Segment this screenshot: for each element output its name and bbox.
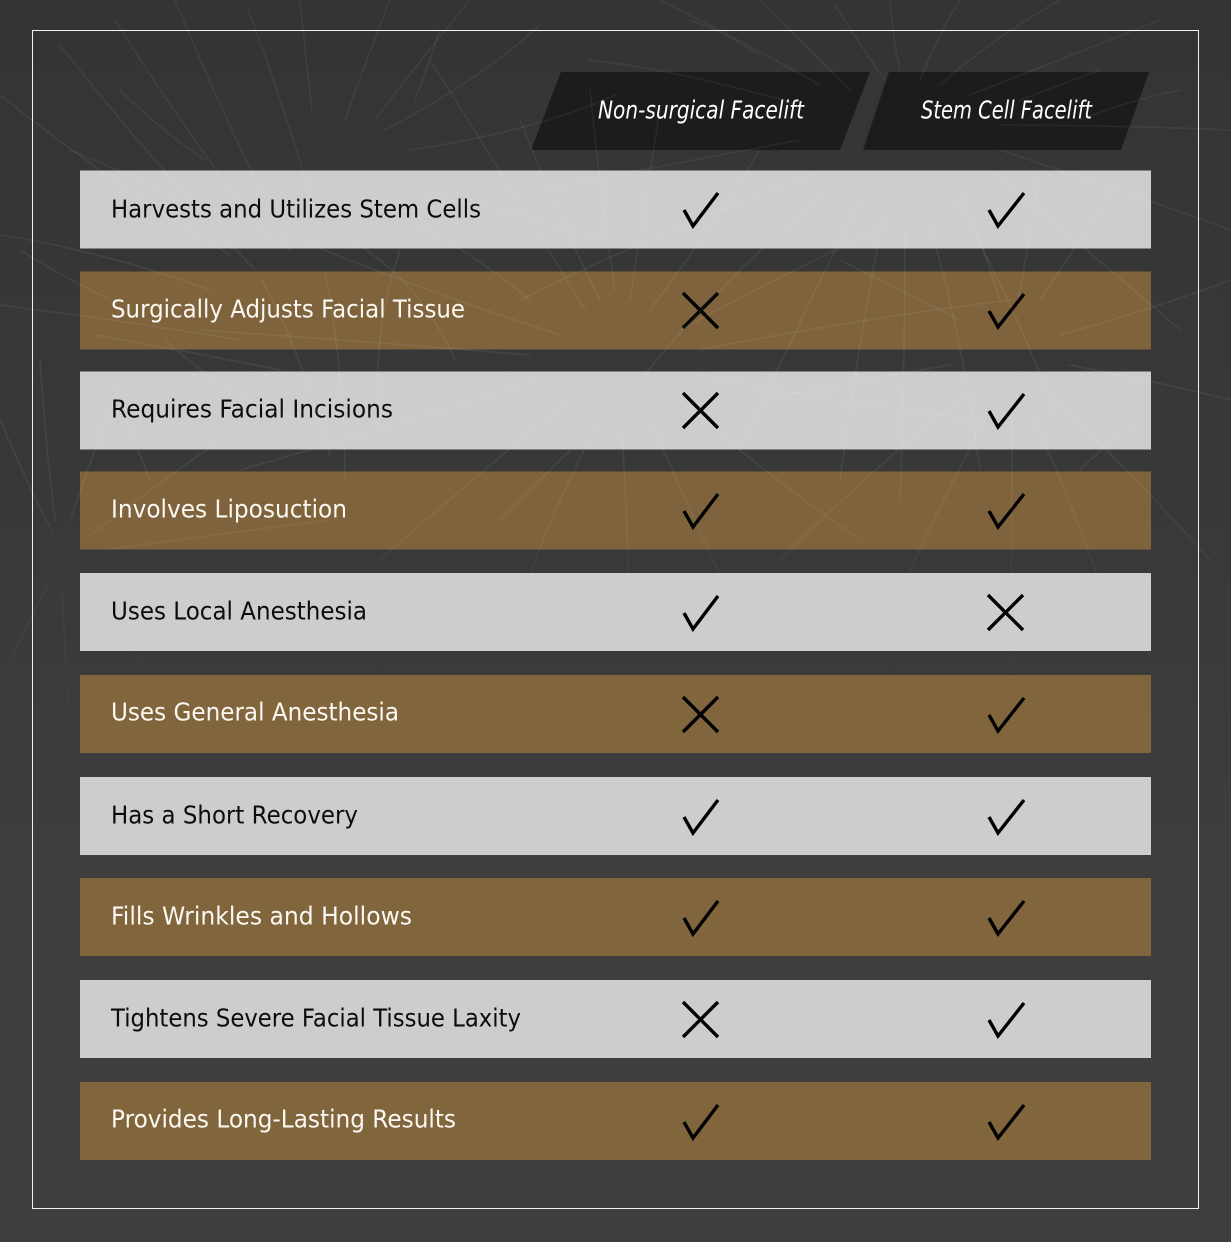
row: Provides Long-Lasting Results: Provides Long-Lasting Results [111, 1104, 456, 1134]
row: Uses General Anesthesia [80, 675, 1151, 753]
row: Tightens Severe Facial Tissue Laxity: Tightens Severe Facial Tissue Laxity [110, 1004, 521, 1032]
row: Requires Facial Incisions: Requires Facial Incisions [111, 394, 393, 424]
row: Harvests and Utilizes Stem Cells: Harvests and Utilizes Stem Cells [111, 194, 481, 224]
row: Surgically Adjusts Facial Tissue [80, 272, 1151, 350]
column header: Stem Cell Facelift [863, 72, 1149, 150]
row: Involves Liposuction: Involves Liposuction [111, 494, 347, 524]
row: Has a Short Recovery: Has a Short Recovery [111, 800, 358, 830]
column header: Non-surgical Facelift [531, 72, 870, 150]
column header: Non-surgical Facelift: Non-surgical Facelift [598, 96, 805, 124]
row: Involves Liposuction [80, 472, 1151, 550]
row: Fills Wrinkles and Hollows [80, 878, 1151, 956]
row: Uses Local Anesthesia: Uses Local Anesthesia [111, 596, 367, 626]
row: Requires Facial Incisions [80, 372, 1151, 450]
row: Fills Wrinkles and Hollows: Fills Wrinkles and Hollows [111, 902, 412, 930]
row: Has a Short Recovery [80, 777, 1151, 855]
row: Tightens Severe Facial Tissue Laxity [80, 980, 1151, 1058]
row: Uses Local Anesthesia [80, 573, 1151, 651]
row: Uses General Anesthesia: Uses General Anesthesia [111, 698, 399, 726]
row: Surgically Adjusts Facial Tissue: Surgically Adjusts Facial Tissue [111, 294, 465, 324]
column header: Stem Cell Facelift: Stem Cell Facelift [921, 96, 1093, 124]
row: Provides Long-Lasting Results [80, 1082, 1151, 1160]
row: Harvests and Utilizes Stem Cells [80, 170, 1151, 248]
